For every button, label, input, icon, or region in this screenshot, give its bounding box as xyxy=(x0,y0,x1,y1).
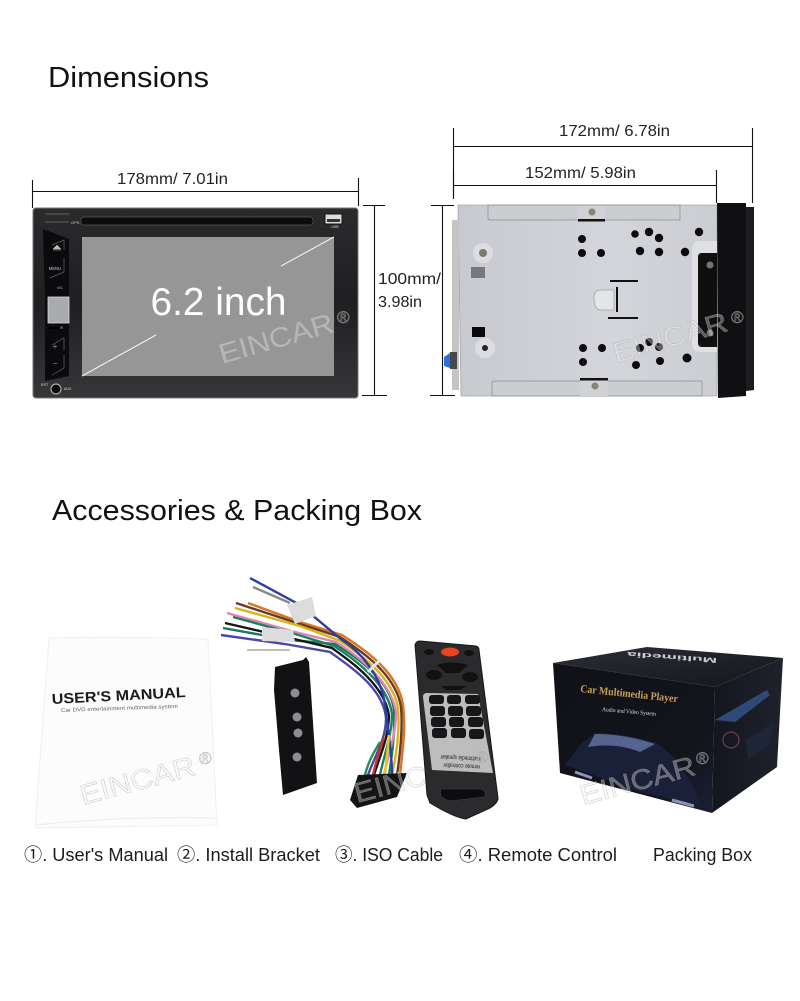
screen diagonal lines xyxy=(82,237,334,376)
remote body xyxy=(415,641,498,819)
power button xyxy=(441,648,459,656)
screen size label: 6.2 inch xyxy=(150,281,286,324)
side button panel: MENU xyxy=(49,266,61,271)
booklet cover xyxy=(35,637,217,828)
item: install bracket xyxy=(274,657,317,795)
manual subtitle: Car DVD entertainment multimedia system xyxy=(61,704,178,714)
heading: Dimensions: Dimensions xyxy=(48,62,209,94)
aux jack: RST xyxy=(41,383,49,387)
box front xyxy=(553,663,715,813)
dimension: side overall depth 172mm: 172mm/ 6.78in xyxy=(559,123,670,140)
heading: Accessories & Packing Box: Accessories & Packing Box xyxy=(52,495,423,527)
box title: Car Multimedia Player xyxy=(580,683,679,705)
wire labels xyxy=(287,597,316,624)
dimension: side height xyxy=(430,205,455,396)
sd slot xyxy=(45,214,69,222)
watermark: EINCAR xyxy=(77,750,199,811)
usb port: USB xyxy=(331,225,339,229)
aux jack: AUX xyxy=(64,387,72,391)
wire bundle xyxy=(221,578,404,775)
caption: user's manual: ①. User's Manual xyxy=(24,845,168,865)
item: packing box xyxy=(553,647,783,813)
dimension: side chassis depth 152mm: 152mm/ 5.98in xyxy=(525,165,636,182)
watermark: ® xyxy=(696,749,709,768)
dimension: front width 178mm xyxy=(32,171,358,208)
dimension: front width 178mm: 178mm/ 7.01in xyxy=(117,171,228,188)
watermark: EINCAR xyxy=(351,748,473,809)
item: packing box: Multimedia xyxy=(627,650,717,663)
captions row xyxy=(24,845,752,865)
watermark: EINCAR xyxy=(609,306,731,369)
side button panel: − xyxy=(53,359,58,368)
dimension: front height 100mm: 3.98in xyxy=(378,294,422,311)
remote upside-down label xyxy=(440,753,481,770)
caption: remote control: ④. Remote Control xyxy=(459,845,617,865)
item: ISO cable with colored wires xyxy=(221,578,473,809)
caption: packing box: Packing Box xyxy=(653,845,752,865)
usb port xyxy=(325,214,342,229)
black front panel edge xyxy=(717,203,754,398)
cable tie xyxy=(368,660,380,672)
watermark: ® xyxy=(199,749,212,768)
remote upside-down label: multimedia speaker xyxy=(440,753,481,762)
box subtitle: Audio and Video System xyxy=(602,707,656,718)
dimension: side chassis depth 152mm xyxy=(453,165,717,203)
remote upside-down label: remote controller xyxy=(442,761,480,770)
screws and square cutouts xyxy=(473,243,493,263)
top buttons xyxy=(424,649,478,690)
caption: ISO cable: ③. ISO Cable xyxy=(335,845,443,865)
keypad panel xyxy=(423,693,493,773)
center slot xyxy=(608,281,638,318)
watermark: EINCAR xyxy=(215,307,337,370)
gray screen xyxy=(82,237,334,376)
blue connector xyxy=(444,353,450,368)
manual title: USER'S MANUAL xyxy=(51,685,186,708)
battery door xyxy=(440,789,486,801)
caption: install bracket: ②. Install Bracket xyxy=(177,845,320,865)
side view of the metal chassis xyxy=(444,203,754,398)
disc slot xyxy=(81,217,313,225)
side cutout xyxy=(692,241,717,352)
bottom flange xyxy=(492,381,702,396)
chassis plate xyxy=(458,205,717,396)
dimension: side overall depth 172mm xyxy=(453,123,752,203)
aux jack xyxy=(41,383,72,394)
watermark: EINCAR xyxy=(577,750,699,811)
top flange xyxy=(488,205,680,220)
item: user's manual booklet xyxy=(35,637,217,828)
side button panel: MIC xyxy=(57,286,64,290)
watermark: ® xyxy=(731,308,744,327)
box side xyxy=(712,658,783,813)
front view of the head unit: GPS xyxy=(71,220,80,225)
watermark: ® xyxy=(337,308,350,327)
side button panel: + xyxy=(53,342,58,351)
side button panel xyxy=(43,229,69,381)
box top xyxy=(553,647,783,687)
side button panel: IR xyxy=(60,326,64,330)
watermark registered mark: ® xyxy=(476,748,489,767)
front view of the head unit xyxy=(33,208,358,398)
dimension: front height 100mm: 100mm/ xyxy=(378,271,442,288)
iso plug xyxy=(350,773,407,808)
mounting holes xyxy=(578,228,703,369)
keypad xyxy=(429,695,484,739)
car image on box xyxy=(565,733,700,805)
dimension: front height 100mm xyxy=(362,205,442,396)
item: remote control xyxy=(415,641,498,819)
unit bezel xyxy=(33,208,358,398)
